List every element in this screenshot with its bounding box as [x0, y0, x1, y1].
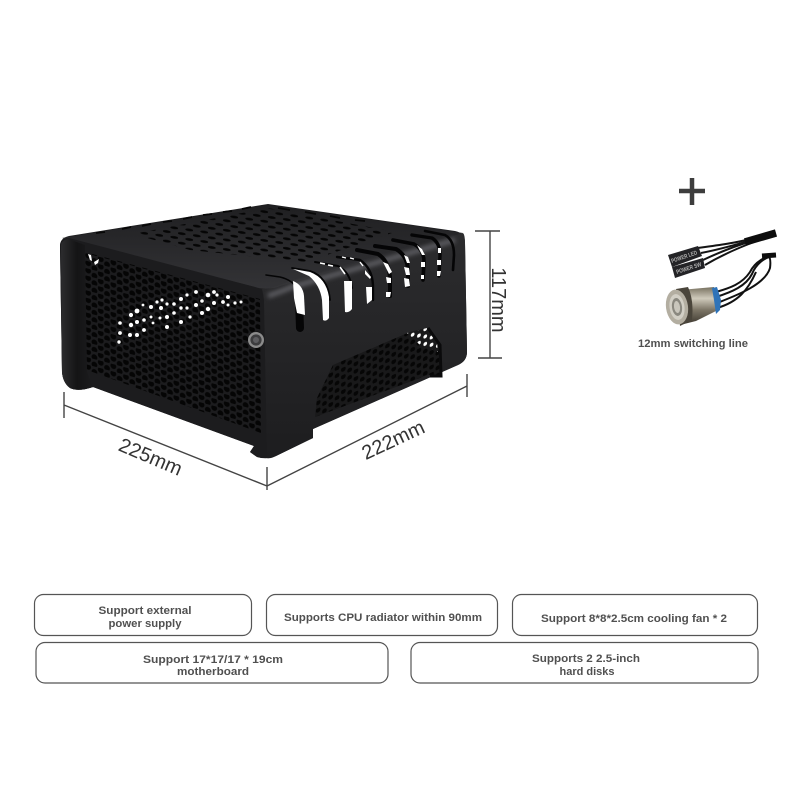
metal switch	[664, 287, 721, 326]
mesh bright holes	[407, 328, 438, 352]
feature box: cooling fan	[512, 594, 758, 636]
slot 9	[425, 231, 454, 270]
feature box: external power: Support external	[98, 605, 192, 617]
upper cable bundle	[698, 233, 776, 265]
slot 7	[393, 240, 424, 280]
left hex mesh	[85, 252, 261, 433]
side vent slots	[266, 231, 454, 328]
mesh recess edge	[428, 328, 441, 376]
feature box: motherboard	[36, 642, 388, 683]
dimension: depth 222mm: 222mm	[359, 416, 428, 465]
feature box: cpu radiator: Supports CPU radiator within 90mm	[284, 612, 482, 624]
slot 4	[337, 257, 373, 300]
rear edge dashes	[96, 207, 365, 233]
connector: power sw: POWER SW	[676, 262, 703, 276]
feature box: hard disks: hard disks	[560, 666, 614, 678]
slot 3	[315, 262, 352, 288]
connector: power led: POWER LED	[671, 250, 699, 265]
right side panel	[262, 233, 467, 458]
feature box: hard disks	[411, 642, 758, 683]
slot 8	[412, 235, 440, 276]
lower cable bundle	[716, 255, 776, 308]
slot 2	[292, 268, 330, 300]
corner see-through holes	[88, 254, 99, 265]
plus sign	[679, 178, 705, 205]
dimension: height 117mm	[475, 231, 509, 358]
dimension: height 117mm: 117mm	[487, 267, 509, 333]
see-through bright holes	[117, 290, 242, 344]
dimension: width 225mm	[64, 392, 267, 490]
inner left flange	[61, 239, 93, 390]
product photo: computer case	[60, 204, 467, 458]
slot 5	[357, 250, 390, 296]
right hex mesh	[315, 328, 440, 417]
feature box: external power: power supply	[108, 618, 182, 630]
feature box: motherboard: motherboard	[177, 666, 249, 678]
feature box: motherboard: Support 17*17/17 * 19cm	[143, 654, 283, 666]
switching line photo	[638, 233, 776, 350]
top vent holes	[133, 208, 395, 262]
bend highlight	[268, 240, 455, 296]
feature box: hard disks: Supports 2 2.5-inch	[532, 653, 640, 665]
slot 1	[266, 275, 298, 290]
feature box: cpu radiator	[266, 594, 498, 636]
power button	[248, 332, 264, 348]
dimension: depth 222mm	[267, 374, 467, 486]
case silhouette	[60, 204, 467, 458]
feature box: cooling fan: Support 8*8*2.5cm cooling fan * 2	[541, 613, 727, 625]
feature box: external power	[34, 594, 252, 636]
caption: 12mm switching line	[638, 338, 748, 350]
top panel	[62, 205, 463, 289]
left front panel	[60, 238, 270, 458]
dimension: width 225mm: 225mm	[115, 434, 185, 481]
slot 6	[375, 246, 408, 286]
